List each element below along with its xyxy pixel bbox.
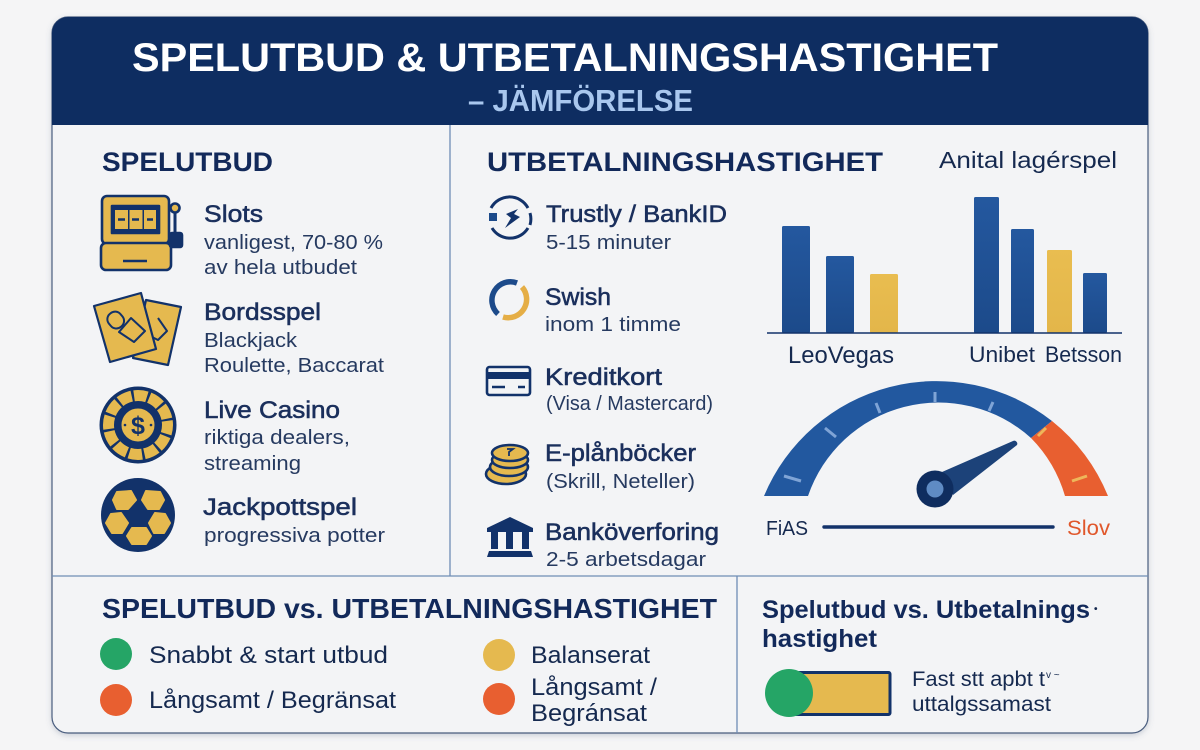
text: jackpottspel [203,494,385,547]
text: e-planbocker: (Skrill, Neteller) [546,470,695,493]
heading: utbetalningshastighet: UTBETALNINGSHASTIGHET [487,147,884,177]
text: bankoverforing: Banköverforing [545,519,719,546]
text: summary note: v ~ [1046,670,1060,681]
text: trustly: Trustly / BankID [546,201,727,228]
legend: langsamt two-line: Långsamt / [531,674,657,701]
icon: cards [94,293,181,365]
gauge needle [916,441,1017,508]
text: live casino [204,397,350,475]
text: slots: vanligest, 70-80 % [204,231,383,254]
text: jackpottspel: Jackpottspel [203,494,357,521]
icon: casino chip: $ [131,412,145,440]
legend: snabbt: Snabbt & start utbud [149,642,388,669]
heading: comparison: SPELUTBUD vs. UTBETALNINGSHASTIGHET [102,593,717,624]
panel: comparison legend [100,593,717,727]
heading: summary: Spelutbud vs. Utbetalnings [762,596,1090,624]
text: slots [204,201,383,279]
gauge scale labels: Slov [1067,517,1111,540]
icon: credit card [487,367,530,395]
text: bordsspel: Bordsspel [204,299,321,326]
text: kreditkort: (Visa / Mastercard) [546,392,713,415]
legend: balanserat: Balanserat [531,642,650,669]
text: swish: inom 1 timme [545,313,681,336]
text: swish: Swish [545,284,611,311]
legend: balanserat [483,639,650,671]
text: bordsspel [204,299,384,377]
text: bankoverforing [545,519,719,571]
title: SPELUTBUD & UTBETALNINGSHASTIGHET [132,36,998,80]
text: jackpottspel: progressiva potter [204,524,385,547]
subtitle: – JÄMFÖRELSE [468,83,693,118]
header band [52,17,1148,125]
icon: swish [492,282,527,318]
bar labels [788,342,1122,369]
text: bordsspel: Roulette, Baccarat [204,354,384,377]
legend: snabbt [100,638,388,670]
text: live casino: streaming [204,452,301,475]
text: trustly [546,201,727,254]
text: slots: av hela utbudet [204,256,357,279]
icon: toggle [765,669,890,717]
chart heading: antal lagerspel: Anital lagérspel [939,147,1117,173]
text: bankoverforing: 2-5 arbetsdagar [546,548,706,571]
legend: langsamt two-line [483,674,657,727]
text: e-planbocker: E-plånböcker [545,440,696,467]
bar chart [767,197,1122,369]
text: trustly: 5-15 minuter [546,231,671,254]
icon: coins [486,445,528,484]
heading: spelutbud: SPELUTBUD [102,147,273,177]
text: kreditkort [545,364,713,415]
text: e-planbocker [545,440,696,493]
bar labels: Unibet [969,342,1035,367]
icon: jackpot ball [101,478,175,552]
panel: utbetalningshastighet [486,147,884,571]
text: live casino: Live Casino [204,397,340,424]
icon: slot machine [101,196,182,270]
text: summary note: uttalgssamast [912,693,1051,716]
heading: summary: hastighet [762,625,878,653]
icon: bank [487,517,533,557]
panel: spelutbud [94,147,385,552]
gauge scale labels: FiAS [766,518,808,540]
text: bordsspel: Blackjack [204,329,298,352]
panel: summary [762,596,1098,717]
legend: langsamt [100,684,396,716]
legend: langsamt: Långsamt / Begränsat [149,687,396,714]
icon: trustly bolt [489,197,531,238]
legend: langsamt two-line: Begránsat [531,700,647,727]
bar labels: Betsson [1045,342,1122,367]
text: summary note: Fast stt apbt t [912,668,1045,691]
speed gauge [764,381,1111,540]
gauge scale labels [766,517,1111,540]
text: live casino: riktiga dealers, [204,426,350,449]
text: swish [545,284,681,336]
text: summary note [912,668,1060,716]
heading: summary [762,596,1098,653]
text: slots: Slots [204,201,263,228]
icon: casino chip [100,386,176,464]
heading: summary: • [1094,604,1098,615]
text: kreditkort: Kreditkort [545,364,662,391]
bar labels: LeoVegas [788,342,894,369]
